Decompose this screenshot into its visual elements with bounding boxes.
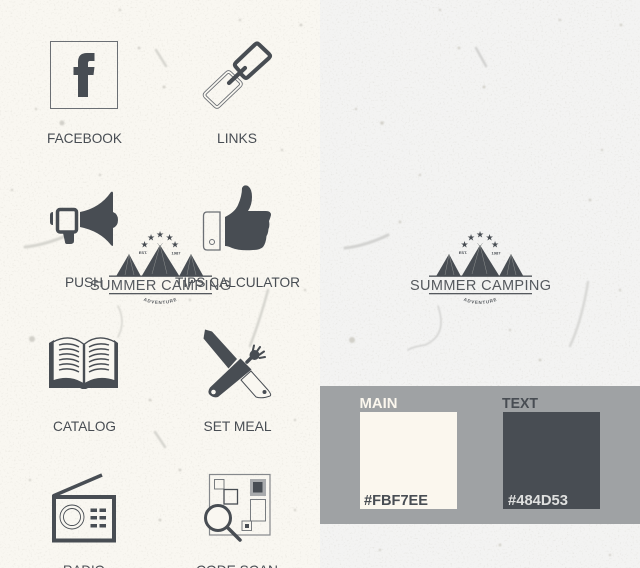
panel: colour palette — [320, 386, 640, 524]
swatch code: main: #FBF7EE — [364, 492, 428, 509]
swatch: text colour — [503, 412, 600, 509]
logo: right — [410, 230, 551, 304]
label: set meal: SET MEAL — [204, 418, 272, 434]
logo: left — [90, 230, 231, 304]
icon: facebook — [50, 42, 118, 108]
logo: left: ★ — [147, 232, 155, 242]
logo: right: ★ — [491, 240, 499, 250]
icon: megaphone — [50, 192, 118, 246]
logo: left: ★ — [165, 232, 174, 242]
logo: left: 1987 — [172, 250, 181, 256]
icon: links — [204, 44, 270, 107]
swatch heading: main: MAIN — [360, 395, 398, 412]
logo: left: ADVENTURE — [144, 298, 177, 304]
label: push: PUSH — [65, 274, 103, 290]
logo: right: ADVENTURE — [464, 298, 497, 304]
label: facebook: FACEBOOK — [47, 130, 123, 146]
icon: radio — [53, 475, 114, 540]
label: tips calculator: TIPS CALCULATOR — [175, 274, 300, 290]
logo: right: EST. — [459, 250, 467, 255]
logo: left: ★ — [140, 240, 149, 250]
logo: right: ★ — [467, 232, 475, 242]
icon: knife and fork — [204, 330, 271, 398]
label: links: LINKS — [217, 130, 257, 146]
icon: thumbs up — [204, 185, 271, 250]
swatch code: text: #484D53 — [508, 492, 568, 509]
logo: right: ★ — [476, 230, 484, 240]
swatch heading: text: TEXT — [502, 395, 538, 412]
label: catalog: CATALOG — [53, 418, 116, 434]
logo: left: EST. — [139, 250, 147, 255]
icon: code scan — [206, 474, 270, 540]
logo: right: 1987 — [492, 250, 501, 256]
logo: right: ★ — [460, 240, 469, 250]
logo: left: SUMMER CAMPING — [90, 278, 231, 294]
logo: left: ★ — [156, 230, 164, 240]
logo: right: SUMMER CAMPING — [410, 278, 551, 294]
swatch: main colour — [360, 412, 457, 509]
icon: open book — [49, 338, 118, 389]
logo: right: ★ — [485, 232, 494, 242]
logo: left: ★ — [171, 240, 179, 250]
